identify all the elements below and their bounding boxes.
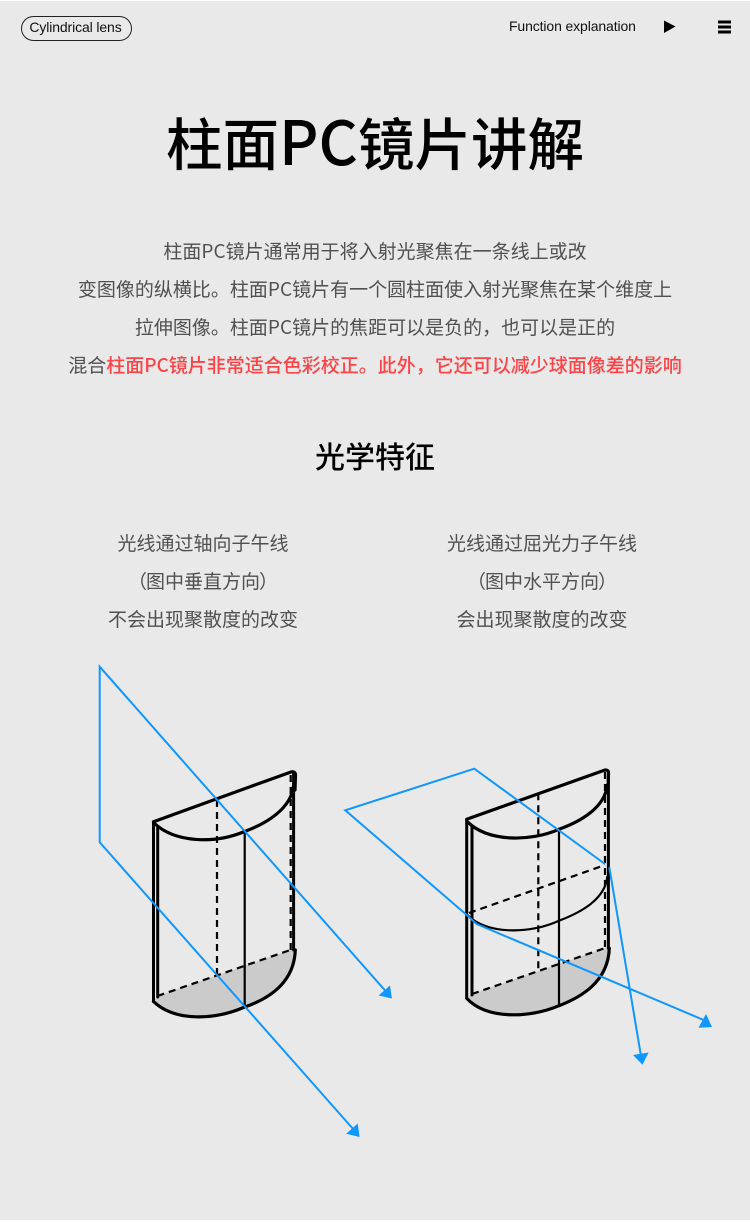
- left caption: 不会出现聚散度的改变: [108, 605, 298, 632]
- rays: right: [345, 769, 712, 1065]
- rays: left: [100, 667, 392, 1137]
- diagram: right lens: [467, 770, 609, 1015]
- section heading: 光学特征: 光学特征: [315, 433, 435, 477]
- icon: menu: [718, 20, 731, 34]
- left caption: [108, 529, 298, 632]
- nav label: Function explanation: Function explanation: [509, 18, 636, 34]
- intro text: 变图像的纵横比。柱面PC镜片有一个圆柱面使入射光聚焦在某个维度上: [78, 275, 672, 302]
- right caption: [447, 529, 637, 632]
- tag: Cylindrical lens: [21, 16, 132, 41]
- right caption: （图中水平方向）: [467, 567, 617, 594]
- icon: play triangle: [664, 20, 676, 33]
- intro text: [68, 237, 682, 378]
- intro text: 混合柱面PC镜片非常适合色彩校正。此外，它还可以减少球面像差的影响: [68, 351, 682, 378]
- intro text: 柱面PC镜片通常用于将入射光聚焦在一条线上或改: [163, 237, 587, 264]
- title: 柱面PC镜片讲解: [166, 94, 584, 183]
- left caption: （图中垂直方向）: [128, 567, 278, 594]
- tag: Cylindrical lens: Cylindrical lens: [29, 19, 122, 35]
- left caption: 光线通过轴向子午线: [117, 529, 288, 556]
- intro text: 拉伸图像。柱面PC镜片的焦距可以是负的，也可以是正的: [135, 313, 615, 340]
- right caption: 会出现聚散度的改变: [456, 605, 628, 632]
- right caption: 光线通过屈光力子午线: [447, 529, 637, 556]
- diagram: left lens: [154, 772, 296, 1017]
